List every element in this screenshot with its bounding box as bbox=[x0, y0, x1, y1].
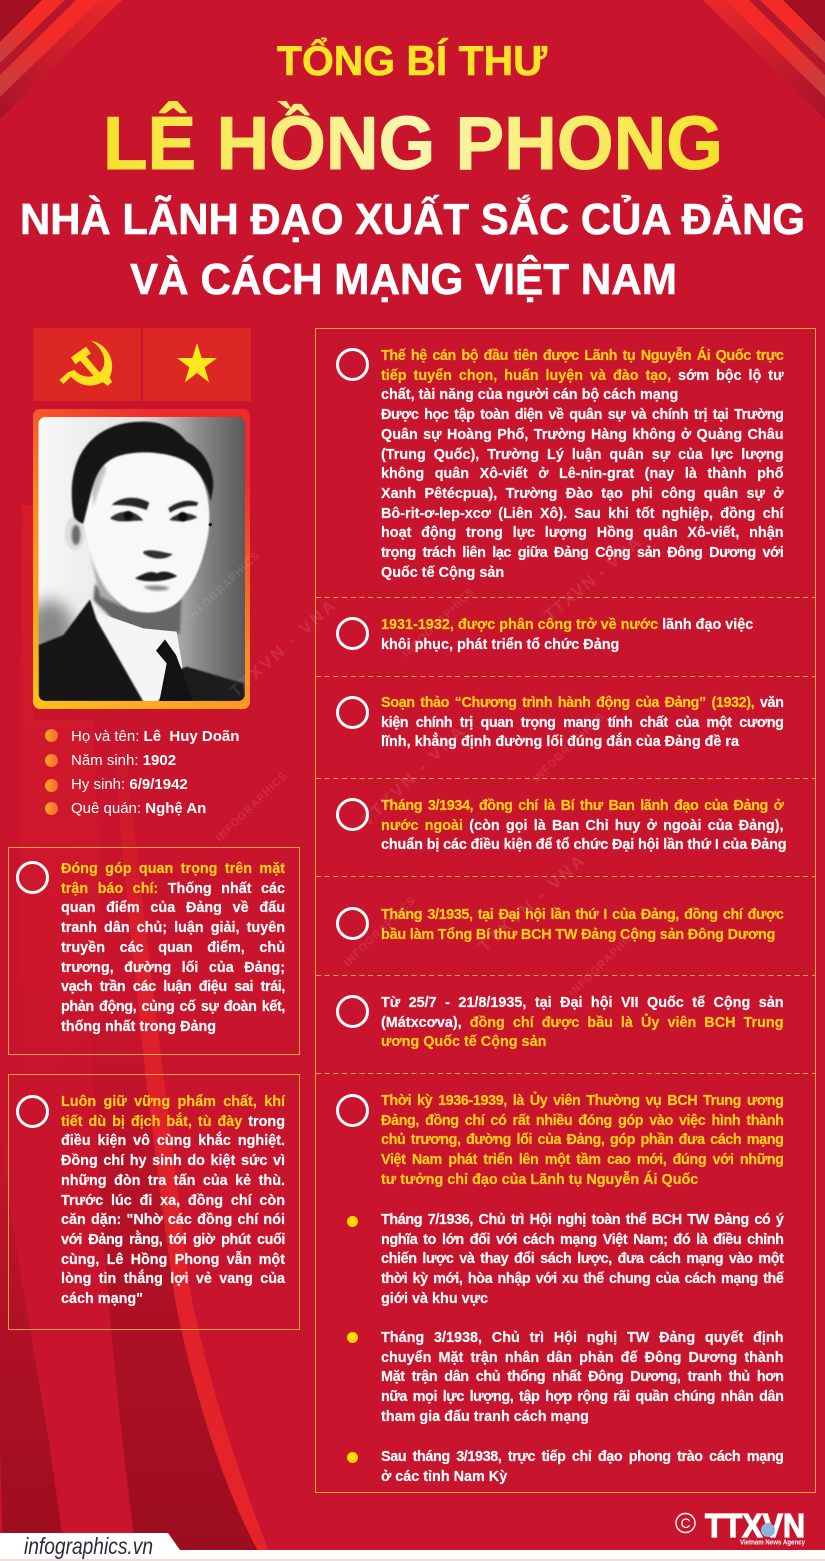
text: first generation of cadres: tiếp tuyển chọn, huấn luyện và đào tạo, sớm bộc lộ tư bbox=[381, 368, 784, 384]
portrait photo frame bbox=[33, 409, 250, 709]
text: Comintern 1935: (Mátxcơva), đồng chí được bầu là Ủy viên BCH Trung bbox=[381, 1015, 784, 1031]
text block: Đồng chí hy sinh do kiệt sức vì bbox=[61, 1153, 285, 1169]
text: first generation of cadres: hoạt động trong lực lượng Hồng quân Xô-viết, nhận bbox=[381, 525, 784, 541]
text: first generation of cadres: Bô-rit-ơ-lep-xcơ (Liên Xô). Sau khi tốt nghiệp, đồng chí bbox=[381, 506, 784, 522]
text: 1936-1939: Thời kỳ 1936-1939, là Ủy viên Thường vụ BCH Trung ương bbox=[381, 1093, 784, 1109]
text: March 1934: nước ngoài (còn gọi là Ban Chỉ huy ở ngoài của Đảng), bbox=[381, 818, 784, 834]
bullet 1 bbox=[346, 1216, 358, 1227]
text: Comintern 1935: Từ 25/7 - 21/8/1935, tại Đại hội VII Quốc tế Cộng sản bbox=[381, 995, 784, 1011]
logo: TTXVN: Vietnam News Agency bbox=[740, 1540, 805, 1546]
circle marker 5 bbox=[336, 907, 369, 940]
footer band with infographics.vn tab: infographics.vn bbox=[24, 1533, 153, 1559]
text: March 1935 bbox=[381, 907, 784, 943]
watermarks: INFOGRAPHICS bbox=[186, 550, 262, 624]
text: first generation of cadres: không quân Xô-viết ở Lê-nin-grat (nay là thành phố bbox=[381, 466, 784, 482]
watermarks: TTXVN - VNA bbox=[226, 597, 339, 701]
bullet 2 bbox=[346, 1332, 358, 1343]
title bbox=[20, 35, 805, 304]
circle marker 3 bbox=[336, 696, 369, 729]
circle marker 2 bbox=[336, 617, 369, 650]
text: 1931-1932 bbox=[381, 617, 753, 653]
text block bbox=[60, 861, 285, 1035]
text: July 1936 bbox=[381, 1212, 784, 1307]
text: first generation of cadres: Quốc tế Cộng sản bbox=[381, 565, 504, 581]
text block: Trước lúc đi xa, đồng chí còn bbox=[61, 1193, 285, 1209]
text: 1936-1939: tư tưởng chỉ đạo của Lãnh tụ Nguyễn Ái Quốc bbox=[381, 1172, 698, 1188]
watermarks: INFOGRAPHICS bbox=[401, 586, 477, 660]
icon: national flag with star bbox=[143, 328, 251, 401]
text: March 1935: Tháng 3/1935, tại Đại hội lần thứ I của Đảng, đồng chí được bbox=[381, 907, 784, 923]
text: March 1935: bầu làm Tổng Bí thư BCH TW Đảng Cộng sản Đông Dương bbox=[381, 927, 775, 943]
text: 1931-1932: khôi phục, phát triển tổ chức Đảng bbox=[381, 637, 619, 653]
text: March 1934: chuẩn bị các điều kiện để tổ chức Đại hội lần thứ I của Đảng bbox=[381, 837, 786, 853]
logo: TTXVN: TTXVN bbox=[705, 1507, 805, 1544]
text: first generation of cadres: Được học tập toàn diện về quân sự và chính trị tại Trường bbox=[381, 407, 784, 423]
text: March 1938: chuyển Mặt trận nhân dân phản đế Đông Dương thành bbox=[381, 1350, 784, 1366]
text: 1936-1939: chủ trương, đường lối của Đảng, góp phần đưa cách mạng bbox=[381, 1132, 784, 1148]
text: action program 1932: Soạn thảo “Chương trình hành động của Đảng” (1932), văn bbox=[381, 695, 784, 711]
title: NHÀ LÃNH ĐẠO XUẤT SẮC CỦA ĐẢNG bbox=[20, 193, 805, 244]
text: first generation of cadres: (Trung Quốc), Trường Lý luận quân sự của lực lượng bbox=[381, 447, 784, 463]
text: 1931-1932: 1931-1932, được phân công trở về nước lãnh đạo việc bbox=[381, 617, 753, 633]
eyebrows, eyes, nose, mouth bbox=[112, 498, 149, 510]
text: March 1934: Tháng 3/1934, đồng chí là Bí thư Ban lãnh đạo của Đảng ở bbox=[381, 798, 784, 814]
text block: trương, đường lối của Đảng; bbox=[61, 960, 285, 976]
watermarks: TTXVN - VNA bbox=[540, 533, 644, 625]
neck shadow bbox=[93, 583, 182, 640]
watermarks: INFOGRAPHICS bbox=[342, 895, 418, 969]
personal info list bbox=[45, 728, 239, 817]
panel: career timeline bbox=[315, 328, 816, 1493]
text block: Luôn giữ vững phẩm chất, khí bbox=[61, 1094, 285, 1110]
panel: steadfast character bbox=[8, 1074, 300, 1330]
text block: cách mạng" bbox=[61, 1291, 143, 1307]
suit bbox=[38, 599, 143, 702]
circle marker bbox=[16, 861, 49, 894]
text: March 1938: Tháng 3/1938, Chủ trì Hội nghị TW Đảng quyết định bbox=[381, 1330, 784, 1346]
text block: căn dặn: "Nhờ các đồng chí nói bbox=[61, 1212, 285, 1228]
text block: lòng tin thắng lợi vẻ vang của bbox=[61, 1271, 285, 1287]
text block: với Đảng rằng, tới giờ phút cuối bbox=[61, 1232, 285, 1248]
bullet bbox=[44, 729, 58, 742]
circle marker 7 bbox=[336, 1094, 369, 1127]
logo: TTXVN bbox=[675, 1507, 805, 1546]
bullet bbox=[44, 754, 58, 767]
text: Comintern 1935: ương Quốc tế Cộng sản bbox=[381, 1034, 546, 1050]
watermarks: TTXVN - VNA bbox=[475, 852, 588, 956]
hometown: Quê quán: Nghệ An bbox=[71, 800, 206, 817]
text: after March 1938: Sau tháng 3/1938, trực tiếp chỉ đạo phong trào cách mạng bbox=[381, 1449, 784, 1465]
title: VÀ CÁCH MẠNG VIỆT NAM bbox=[130, 254, 677, 304]
text block bbox=[60, 1094, 286, 1307]
name: Họ và tên: Lê Huy Doãn bbox=[71, 728, 239, 745]
text block: những đòn tra tấn của kẻ thù. bbox=[61, 1173, 285, 1189]
text block: truyền các quan điểm, chủ bbox=[61, 940, 285, 956]
panel: press front contribution bbox=[8, 847, 300, 1055]
text block: điều kiện vô cùng khắc nghiệt. bbox=[61, 1133, 285, 1149]
text block: tranh dân chủ; luận giải, tuyên bbox=[61, 920, 285, 936]
decorative corner stripes right bbox=[703, 0, 825, 119]
ear bbox=[65, 516, 85, 551]
portrait photo bbox=[38, 417, 245, 701]
text: first generation of cadres bbox=[380, 346, 784, 581]
text: 1936-1939: Đảng, đồng chí có rất nhiều đóng góp vào việc hình thành bbox=[381, 1113, 784, 1129]
text: March 1938: tham gia đấu tranh cách mạng bbox=[381, 1409, 589, 1425]
text: first generation of cadres: trọng trách liên lạc giữa Đảng Cộng sản Đông Dương với bbox=[381, 545, 784, 561]
circle marker 4 bbox=[336, 798, 369, 831]
circle marker 1 bbox=[336, 348, 369, 381]
watermarks bbox=[186, 533, 644, 999]
watermarks: TTXVN - VNA bbox=[358, 722, 468, 830]
text: 1936-1939 bbox=[380, 1091, 784, 1188]
bullet bbox=[44, 779, 58, 792]
text block: trận báo chí: Thống nhất các bbox=[61, 881, 285, 897]
text block: thống nhất trong Đảng bbox=[61, 1019, 216, 1035]
watermarks: INFOGRAPHICS bbox=[531, 711, 607, 785]
text: March 1938: Mặt trận dân chủ thống nhất Đông Dương, tranh thủ hơn bbox=[381, 1369, 784, 1385]
text block: cùng, Lê Hồng Phong vẫn một bbox=[61, 1252, 285, 1268]
text: July 1936: Tháng 7/1936, Chủ trì Hội nghị toàn thể BCH TW Đảng có ý bbox=[381, 1212, 784, 1228]
title: LÊ HỒNG PHONG bbox=[103, 101, 723, 185]
text block: quan điểm của Đảng về đấu bbox=[61, 900, 285, 916]
text: first generation of cadres: Thế hệ cán bộ đầu tiên được Lãnh tụ Nguyễn Ái Quốc trực bbox=[381, 348, 784, 364]
text: action program 1932: lĩnh, khẳng định đường lối đúng đắn của Đảng đề ra bbox=[381, 734, 739, 750]
text: March 1938: nữa mọi lực lượng, tập hợp rộng rãi quần chúng nhân dân bbox=[381, 1389, 784, 1405]
text: March 1934 bbox=[381, 798, 786, 853]
circle marker bbox=[16, 1095, 49, 1128]
death date: Hy sinh: 6/9/1942 bbox=[71, 776, 188, 793]
icon: party flag with hammer and sickle bbox=[33, 328, 141, 401]
decorative corner stripes left bbox=[0, 0, 122, 119]
text: March 1938 bbox=[381, 1330, 784, 1425]
bullet 3 bbox=[346, 1452, 358, 1463]
tie bbox=[156, 639, 193, 702]
text: first generation of cadres: Xanh Pêtécpua), Trường Đào tạo phi công quân sự ở bbox=[381, 486, 784, 502]
text block: Đóng góp quan trọng trên mặt bbox=[61, 861, 285, 877]
circle marker 6 bbox=[336, 995, 369, 1028]
watermarks: INFOGRAPHICS bbox=[567, 925, 643, 999]
text: July 1936: nghĩa to lớn đối với cách mạng Việt Nam; đó là điều chỉnh bbox=[381, 1232, 784, 1248]
text: after March 1938: ở các tỉnh Nam Kỳ bbox=[381, 1469, 507, 1485]
logo: TTXVN: C bbox=[680, 1515, 691, 1531]
text: Comintern 1935 bbox=[381, 995, 784, 1050]
shirt bbox=[91, 598, 183, 702]
footer band with infographics.vn tab bbox=[0, 1533, 825, 1561]
text block: tiết dù bị địch bắt, tù đày trong bbox=[61, 1114, 285, 1130]
text: July 1936: chiến lược và thay đổi sách lược, đưa cách mạng vào một bbox=[381, 1251, 784, 1267]
title: TỔNG BÍ THƯ bbox=[277, 35, 547, 84]
text: July 1936: thời kỳ mới, hòa nhập với xu thế chung của cách mạng thế bbox=[381, 1271, 784, 1287]
hair bbox=[72, 422, 213, 523]
text: July 1936: giới và khu vực bbox=[381, 1291, 488, 1307]
birth year: Năm sinh: 1902 bbox=[71, 752, 176, 769]
text: action program 1932: kiện chính trị quan trọng mang tính chất của một cương bbox=[381, 715, 784, 731]
text: first generation of cadres: chất, tài năng của người cán bộ cách mạng bbox=[381, 387, 678, 403]
text block: phản động, củng cố sự đoàn kết, bbox=[61, 999, 285, 1015]
text: 1936-1939: Việt Nam phát triển lên một tầm cao mới, đúng với những bbox=[381, 1152, 784, 1168]
face bbox=[83, 452, 209, 613]
bullet bbox=[44, 802, 58, 815]
text: first generation of cadres: Quân sự Hoàng Phố, Trường Hàng không ở Quảng Châu bbox=[381, 427, 784, 443]
watermarks: INFOGRAPHICS bbox=[214, 770, 290, 844]
text block: vạch trần các luận điệu sai trái, bbox=[61, 979, 285, 995]
text: action program 1932 bbox=[381, 695, 784, 750]
text: after March 1938 bbox=[381, 1449, 784, 1485]
